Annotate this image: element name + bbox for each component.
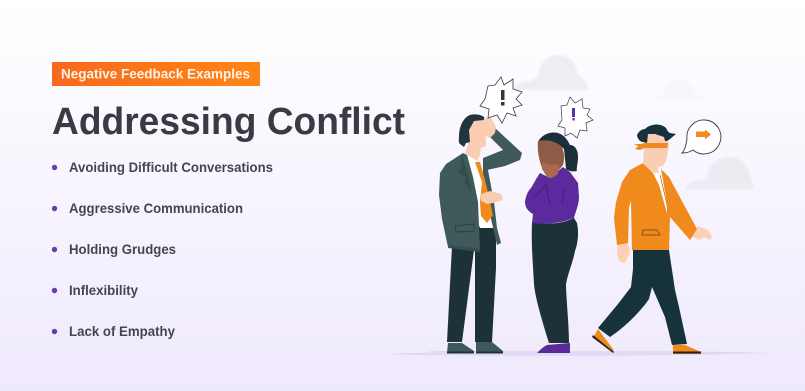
cloud: top centre <box>513 55 588 90</box>
jacket <box>439 153 480 252</box>
cloud: faint top right <box>650 79 705 100</box>
left hand <box>617 243 630 263</box>
bullet list <box>52 160 273 339</box>
hair <box>459 114 485 147</box>
trousers <box>532 218 578 343</box>
neck and face <box>643 133 669 173</box>
bullet: Avoiding Difficult Conversations: Avoiding Difficult Conversations <box>69 160 273 175</box>
figure: man in grey suit <box>439 114 522 354</box>
hair <box>637 125 676 143</box>
bullet: Inflexibility: Inflexibility <box>69 283 138 298</box>
front shoe <box>673 345 701 354</box>
face <box>538 140 564 173</box>
title: Addressing Conflict <box>52 101 405 143</box>
right trouser leg <box>475 226 496 342</box>
shoe <box>537 343 570 353</box>
bullet: Holding Grudges: Holding Grudges <box>69 242 176 257</box>
face and neck <box>465 118 486 161</box>
trousers <box>598 250 687 345</box>
raised arm <box>483 128 522 170</box>
ground shadow <box>385 351 769 356</box>
bullet: Aggressive Communication: Aggressive Communication <box>69 201 243 216</box>
hair <box>538 132 578 171</box>
shoes <box>447 343 474 353</box>
shirt <box>463 153 493 228</box>
shirt <box>645 163 669 214</box>
pocket <box>455 224 474 232</box>
raised hand <box>483 118 496 138</box>
hands <box>542 162 559 178</box>
tie <box>475 162 493 223</box>
figure: blindfolded man walking <box>592 125 712 354</box>
spiky speech burst: man <box>480 77 522 123</box>
jacket <box>614 163 697 250</box>
blindfold <box>634 143 668 150</box>
top <box>525 167 579 224</box>
jacket right panel <box>483 158 501 245</box>
hand on chest <box>481 191 503 204</box>
speech bubble with arrow <box>682 120 721 154</box>
figure: woman in purple <box>525 132 579 353</box>
bullet: Lack of Empathy: Lack of Empathy <box>69 324 175 339</box>
spiky speech burst: woman <box>558 97 593 138</box>
cloud: right <box>685 157 755 189</box>
pocket <box>642 230 660 235</box>
arrow icon <box>696 130 711 140</box>
badge: Negative Feedback Examples: Negative Feedback Examples <box>61 66 250 82</box>
left trouser leg <box>447 246 474 342</box>
right hand <box>691 226 712 240</box>
badge: Negative Feedback Examples <box>52 62 260 86</box>
back shoe <box>593 329 614 352</box>
